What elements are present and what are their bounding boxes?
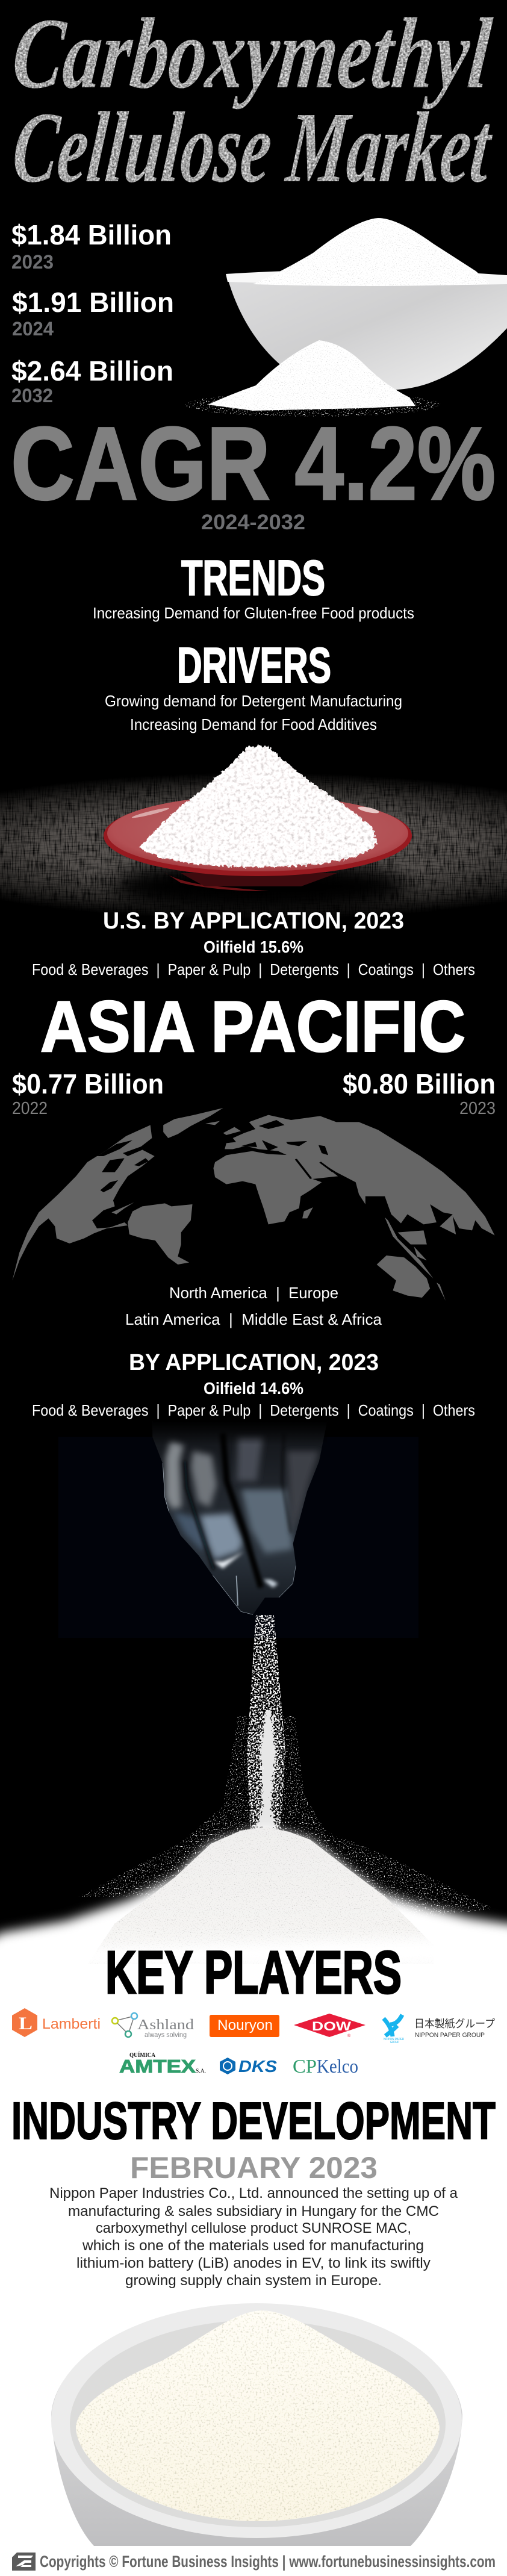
logo: Nouryon: Nouryon bbox=[217, 2017, 273, 2033]
value: Asia Pacific 2022: 2022 bbox=[12, 1099, 48, 1118]
development paragraph: manufacturing & sales subsidiary in Hungary for the CMC bbox=[68, 2203, 439, 2220]
regions list: North America | Europe bbox=[169, 1284, 338, 1302]
footer bbox=[12, 2553, 496, 2571]
value 2032: 2032 bbox=[11, 385, 53, 406]
panel: market values bbox=[11, 219, 174, 406]
logo: Dow bbox=[294, 2014, 365, 2038]
logo: DKS: DKS bbox=[238, 2057, 277, 2076]
image: dark navy backdrop bbox=[58, 1437, 418, 1638]
panel: company logos bbox=[12, 2008, 495, 2077]
value: Asia Pacific 2023: 2023 bbox=[459, 1099, 496, 1118]
logo: Ashland: always solving bbox=[145, 2030, 187, 2039]
value 2024: $1.91 Billion bbox=[12, 287, 174, 318]
development paragraph: carboxymethyl cellulose product SUNROSE MAC, bbox=[96, 2220, 411, 2236]
value 2023: 2023 bbox=[11, 251, 54, 273]
logo: Lamberti: Lamberti bbox=[42, 2016, 101, 2032]
development paragraph: which is one of the materials used for manufacturing bbox=[82, 2238, 424, 2254]
icon: Fortune Business Insights logo bbox=[12, 2553, 36, 2571]
logo: Nippon Paper Group: NIPPON PAPER bbox=[384, 2038, 404, 2041]
logo: Nouryon bbox=[210, 2015, 279, 2037]
logo: CP Kelco: Kelco bbox=[317, 2055, 358, 2077]
value 2023 bbox=[11, 219, 172, 273]
value: Asia Pacific 2023 bbox=[343, 1068, 496, 1118]
title bbox=[8, 0, 497, 204]
heading: trends: TRENDS bbox=[181, 550, 325, 606]
logo: Nippon Paper Group bbox=[384, 2015, 495, 2044]
value 2024: 2024 bbox=[12, 318, 54, 340]
drivers text: Increasing Demand for Food Additives bbox=[130, 715, 377, 733]
logo: Nippon Paper Group: NIPPON PAPER GROUP bbox=[415, 2032, 485, 2039]
image: gloved hand bbox=[152, 1421, 327, 1615]
U.S. leading segment: Oilfield 15.6% bbox=[204, 938, 303, 956]
logo: Dow: DOW bbox=[312, 2020, 351, 2033]
logo: Ashland: Ashland bbox=[137, 2017, 194, 2033]
global leading segment: Oilfield 14.6% bbox=[204, 1379, 303, 1398]
section: U.S. by application bbox=[32, 908, 475, 978]
logo: Nippon Paper Group: GROUP bbox=[390, 2041, 400, 2044]
development paragraph: growing supply chain system in Europe. bbox=[125, 2273, 382, 2289]
value: Asia Pacific 2022: $0.77 Billion bbox=[12, 1068, 164, 1100]
image: flour on red plate bbox=[0, 745, 507, 921]
regions list bbox=[125, 1284, 382, 1328]
value 2032 bbox=[11, 355, 173, 406]
value 2023: $1.84 Billion bbox=[11, 219, 172, 250]
logo: Quimica Amtex: QUÍMICA bbox=[129, 2052, 156, 2059]
value: Asia Pacific 2023: $0.80 Billion bbox=[343, 1068, 496, 1100]
section: global by application bbox=[32, 1350, 475, 1419]
logo: CP Kelco bbox=[293, 2055, 358, 2077]
logo: Quimica Amtex: AMTEX bbox=[119, 2056, 196, 2077]
development paragraph bbox=[49, 2185, 458, 2289]
value 2024 bbox=[12, 287, 174, 340]
logo: Lamberti: L bbox=[19, 2014, 33, 2033]
trends text: Increasing Demand for Gluten-free Food products bbox=[93, 604, 414, 622]
development paragraph: lithium-ion battery (LiB) anodes in EV, to link its swiftly bbox=[76, 2255, 431, 2271]
heading: Asia Pacific: ASIA PACIFIC bbox=[40, 986, 465, 1067]
CAGR period: 2024-2032 bbox=[201, 511, 305, 534]
logo: Quimica Amtex bbox=[119, 2052, 206, 2077]
value: Asia Pacific 2022 bbox=[12, 1068, 164, 1118]
logo: CP Kelco: CP bbox=[293, 2055, 317, 2077]
heading: drivers: DRIVERS bbox=[177, 637, 331, 693]
image: powder mound with falling stream bbox=[0, 1615, 507, 2576]
logo: Ashland bbox=[112, 2013, 194, 2039]
image: white bowl of powder bbox=[185, 218, 507, 417]
world map globe bbox=[12, 1108, 495, 1301]
drivers text bbox=[105, 692, 402, 733]
logo: Quimica Amtex: S.A. bbox=[196, 2068, 206, 2074]
logo: Nippon Paper Group: 日本製紙グループ bbox=[414, 2018, 495, 2030]
drivers text: Growing demand for Detergent Manufacturing bbox=[105, 692, 402, 710]
value 2032: $2.64 Billion bbox=[11, 355, 173, 387]
U.S. heading: U.S. BY APPLICATION, 2023 bbox=[103, 908, 404, 934]
date: FEBRUARY 2023 bbox=[130, 2151, 378, 2185]
logo: DKS bbox=[220, 2057, 277, 2076]
regions list: Latin America | Middle East & Africa bbox=[125, 1310, 382, 1328]
logo: Lamberti bbox=[12, 2008, 101, 2037]
logo: Dow: ® bbox=[347, 2033, 351, 2038]
image: cream powder in white bowl bbox=[51, 2303, 462, 2546]
development paragraph: Nippon Paper Industries Co., Ltd. announced the setting up of a bbox=[49, 2185, 458, 2201]
global heading: BY APPLICATION, 2023 bbox=[129, 1350, 379, 1375]
